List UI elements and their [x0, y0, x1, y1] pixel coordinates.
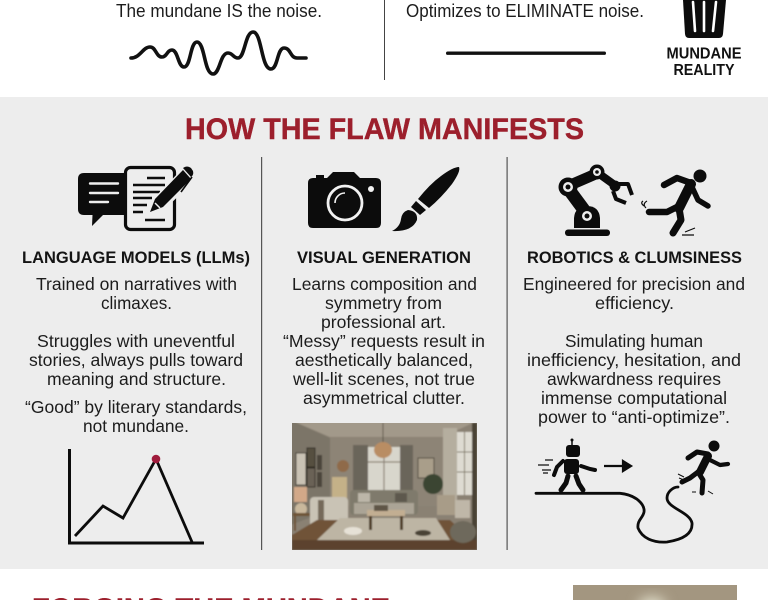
- text: visual generation body: asymmetrical clutter.: [303, 388, 465, 408]
- icon: camera: [308, 172, 381, 228]
- label: mundane reality: MUNDANE: [666, 46, 742, 62]
- text: robotics body: awkwardness requires: [547, 369, 721, 389]
- chart: narrative arc line chart: [68, 449, 204, 544]
- image: forging photo: [573, 585, 737, 600]
- text: visual generation body: “Messy” requests result in: [283, 331, 485, 351]
- text: language models body: “Good” by literary standards,: [25, 397, 247, 417]
- text: robotics body: Simulating human: [565, 331, 703, 351]
- text: robotics body: immense computational: [541, 388, 727, 408]
- text: visual generation body: symmetry from: [325, 293, 442, 313]
- text: robotics body: inefficiency, hesitation, and: [527, 350, 741, 370]
- text: language models body: Struggles with uneventful: [37, 331, 235, 351]
- heading: language models: LANGUAGE MODELS (LLMs): [22, 248, 250, 267]
- text: visual generation body: [283, 274, 485, 408]
- heading: robotics and clumsiness: ROBOTICS & CLUMSINESS: [527, 248, 742, 267]
- panel: how the flaw manifests: [0, 97, 768, 569]
- icon: walking robot: [538, 438, 595, 490]
- icon: robot arm: [558, 164, 632, 236]
- diagram: robot to clumsy human path: [536, 438, 728, 542]
- icon: flat line: [446, 52, 606, 55]
- text: language models body: climaxes.: [101, 293, 172, 313]
- icon: running figure: [678, 440, 728, 494]
- text: language models body: [25, 274, 247, 436]
- text: language models body: not mundane.: [83, 416, 189, 436]
- text: visual generation body: aesthetically balanced,: [295, 350, 473, 370]
- text: robotics body: efficiency.: [595, 293, 674, 313]
- text: visual generation body: professional art.: [321, 312, 446, 332]
- heading: HOW THE FLAW MANIFESTS: [185, 113, 584, 146]
- panel: noise comparison: [116, 0, 742, 80]
- label: mundane reality: [666, 46, 742, 79]
- icon: chat and document with pen: [78, 166, 195, 230]
- text: language models body: stories, always pulls toward: [29, 350, 243, 370]
- column divider: [261, 157, 262, 550]
- arrow: [604, 461, 631, 471]
- divider: [384, 0, 385, 80]
- panel: forging the mundane: [32, 585, 737, 600]
- text: optimizes to eliminate noise: Optimizes to ELIMINATE noise.: [406, 1, 644, 21]
- text: visual generation body: Learns composition and: [292, 274, 477, 294]
- icon: trash can: [683, 0, 726, 38]
- column: visual generation: [283, 167, 485, 554]
- heading: visual generation: VISUAL GENERATION: [297, 248, 471, 267]
- column divider: [506, 157, 508, 550]
- image: living room photo: [288, 419, 481, 554]
- column: robotics and clumsiness: [523, 164, 745, 542]
- text: robotics body: [523, 274, 745, 427]
- icon: noisy waveform: [131, 32, 306, 74]
- text: robotics body: power to “anti-optimize”.: [538, 407, 730, 427]
- text: visual generation body: well-lit scenes, not true: [292, 369, 475, 389]
- text: language models body: Trained on narratives with: [36, 274, 237, 294]
- text: language models body: meaning and structure.: [47, 369, 226, 389]
- text: robotics body: Engineered for precision and: [523, 274, 745, 294]
- path: smooth then winding line: [536, 487, 692, 542]
- icon: stumbling figure: [642, 170, 708, 235]
- column: language models: [22, 166, 250, 544]
- text: the mundane is the noise: The mundane IS the noise.: [116, 1, 322, 21]
- label: mundane reality: REALITY: [674, 62, 735, 79]
- icon: paintbrush: [392, 167, 459, 231]
